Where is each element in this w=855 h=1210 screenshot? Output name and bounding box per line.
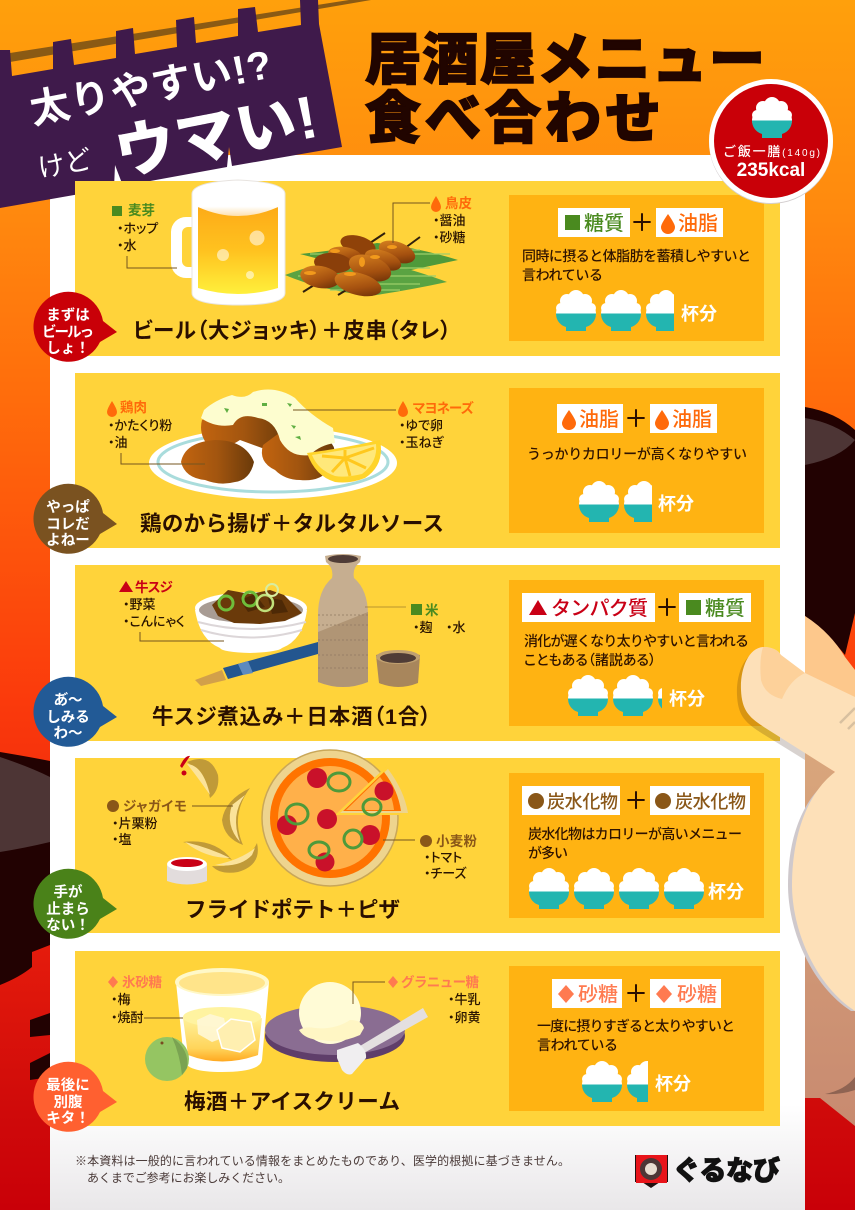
ingredient label: rice: ・水 [446, 620, 466, 635]
ingredient label: malt: ・水 [117, 238, 137, 253]
footnote: あくまでご参考にお楽しみください。 [87, 1170, 290, 1185]
nutrient tags: 糖質 [705, 597, 745, 620]
illustration: ice cream plate and spoon [265, 982, 428, 1074]
speech bubble: コレだ [46, 516, 90, 533]
footnote [75, 1153, 570, 1185]
dish title: 梅酒＋アイスクリーム [184, 1090, 400, 1114]
nutrient tags: 炭水化物 [547, 792, 618, 812]
rice bowl count [529, 868, 744, 909]
ingredient label: rice [365, 602, 466, 635]
description: 同時に摂ると体脂肪を蓄積しやすいと [522, 248, 751, 264]
ingredient label: potato: ・片栗粉 [112, 816, 158, 831]
description: 言われている [537, 1037, 618, 1053]
ingredient label: malt: ・ホップ [117, 221, 159, 236]
speech bubble: ビールっ [42, 323, 94, 341]
icon: rice bowl [752, 97, 792, 138]
nutrient tags: 油脂 [579, 408, 619, 431]
speech bubble: よねー [46, 532, 90, 549]
ingredient label: rock sugar: 氷砂糖 [122, 974, 162, 990]
nutrient tags: ＋ [624, 406, 648, 433]
nutrient tags [558, 208, 723, 237]
noren rod [10, 0, 371, 62]
dish title: 鶏のから揚げ＋タルタルソース [140, 512, 444, 536]
slogan connector: けど [35, 144, 94, 184]
nutrient tags: ＋ [630, 210, 654, 237]
illustration: chicken skin skewers on leaves [285, 232, 458, 301]
speech bubble: 止まら [46, 901, 90, 918]
nutrient tags [557, 404, 717, 433]
ingredient label: potato: ・塩 [112, 832, 132, 847]
ingredient label: mayonnaise: ・玉ねぎ [399, 435, 445, 450]
ingredient label: chicken skin [393, 195, 472, 245]
nutrient tags: 油脂 [678, 212, 718, 235]
illustration: sake cup [376, 650, 420, 687]
ingredient label: wheat flour: 小麦粉 [436, 833, 478, 849]
ingredient label: rice: 米 [425, 602, 439, 618]
speech bubble [33, 677, 117, 747]
speech bubble: キタ！ [46, 1110, 90, 1127]
main title: 食べ合わせ [365, 87, 661, 150]
description: が多い [528, 845, 568, 861]
speech bubble: やっぱ [46, 499, 90, 516]
illustration: pizza [262, 750, 413, 886]
description [528, 826, 742, 861]
noren banner with slogan [0, 0, 342, 208]
description: 消化が遅くなり太りやすいと言われる [524, 633, 749, 649]
speech bubble: 最後に [46, 1076, 90, 1094]
ingredient label: potato: ジャガイモ [123, 799, 187, 814]
rice bowl count: 杯分 [658, 494, 694, 514]
white content column [50, 155, 805, 1210]
dish title: ビール（大ジョッキ）＋皮串（タレ） [133, 319, 451, 343]
illustration: chopsticks [195, 642, 318, 686]
illustration: beer mug [171, 180, 285, 305]
ingredient label: mayonnaise [293, 400, 474, 450]
ingredient label: chicken: 鶏肉 [120, 399, 147, 415]
ingredient label: chicken [107, 399, 205, 464]
ingredient label: mayonnaise: マヨネーズ [412, 400, 474, 416]
speech bubble [33, 484, 117, 554]
ingredient label: beef tendon [119, 579, 224, 641]
ingredient label: beef tendon: 牛スジ [135, 579, 173, 595]
ingredient label: rock sugar: ・焼酎 [111, 1010, 144, 1025]
ingredient label: chicken: ・油 [108, 435, 128, 450]
description: 一度に摂りすぎると太りやすいと [537, 1018, 735, 1034]
nutrient tags [522, 786, 750, 815]
ingredient label: rock sugar: ・梅 [111, 992, 131, 1007]
nutrient tags: 砂糖 [677, 983, 717, 1006]
nutrient tags [522, 593, 751, 622]
illustration: green plum [145, 1037, 189, 1081]
illustration: plum wine glass [175, 968, 269, 1072]
speech bubble [33, 869, 117, 939]
speech bubble: 手が [54, 883, 83, 901]
ingredient label: granulated sugar: グラニュー糖 [401, 974, 480, 990]
speech bubble: しょ！ [46, 340, 90, 357]
panel 4: french fries and pizza [33, 750, 780, 939]
rice bowl count: 杯分 [655, 1074, 691, 1094]
ingredient label: beef tendon: ・野菜 [123, 597, 156, 612]
dish title: フライドポテト＋ピザ [185, 898, 400, 922]
panel 2: fried chicken and tartar sauce [33, 373, 780, 554]
speech bubble: 別腹 [54, 1094, 83, 1111]
main title [365, 28, 765, 150]
speech bubble: まずは [46, 307, 90, 324]
main title: 居酒屋メニュー [365, 28, 765, 91]
speech bubble [33, 1062, 117, 1132]
rice bowl count [582, 1061, 691, 1102]
logo: gurunavi [635, 1148, 780, 1188]
illustration: potato wedges and ketchup [167, 756, 258, 884]
badge label: ご飯一膳(140g) [723, 144, 820, 159]
ingredient label: mayonnaise: ・ゆで卵 [399, 418, 443, 433]
ingredient label: rice: ・麹 [413, 620, 433, 635]
left table silhouette [0, 752, 50, 1080]
speech bubble: わ〜 [54, 725, 82, 742]
panel 1: beer and chicken skin skewers [33, 180, 780, 362]
description: こともある（諸説ある） [524, 652, 656, 668]
illustration: stew bowl [195, 584, 307, 653]
speech bubble: あ゙〜 [54, 691, 82, 709]
nutrient tags: タンパク質 [551, 597, 648, 620]
nutrient tags: 油脂 [672, 408, 712, 431]
description: うっかりカロリーが高くなりやすい [527, 446, 747, 462]
ingredient label: wheat flour: ・トマト [424, 850, 462, 865]
ingredient label: malt [112, 202, 177, 268]
right table silhouette [805, 407, 855, 655]
hand and belly illustration [737, 616, 855, 1126]
rice bowl count [579, 481, 694, 522]
nutrient tags: 砂糖 [578, 983, 618, 1006]
description: 炭水化物はカロリーが高いメニュー [528, 826, 742, 842]
ingredient label: granulated sugar [353, 974, 481, 1025]
rice calorie badge [709, 79, 833, 204]
logo: gurunavi: ぐるなび [673, 1156, 780, 1186]
nutrient tags: 糖質 [584, 212, 624, 235]
ingredient label: beef tendon: ・こんにゃく [123, 614, 185, 629]
ingredient label: granulated sugar: ・卵黄 [448, 1010, 481, 1025]
rice bowl count: 杯分 [681, 304, 717, 324]
rice bowl count: 杯分 [669, 689, 705, 709]
description [522, 248, 751, 283]
ingredient label: wheat flour [383, 833, 478, 881]
rice bowl count [556, 290, 717, 331]
ingredient label: rock sugar [108, 974, 183, 1025]
nutrient tags [552, 979, 721, 1008]
description [524, 633, 749, 668]
nutrient tags: ＋ [624, 981, 648, 1008]
ingredient label: chicken: ・かたくり粉 [108, 418, 172, 433]
footnote: ※本資料は一般的に言われている情報をまとめたものであり、医学的根拠に基づきません。 [75, 1153, 570, 1168]
rice bowl count: 杯分 [708, 882, 744, 902]
speech bubble [33, 292, 117, 362]
nutrient tags: 炭水化物 [675, 792, 746, 812]
rice bowl count [568, 675, 705, 716]
description: 言われている [522, 267, 603, 283]
nutrient tags: ＋ [655, 595, 679, 622]
speech bubble: しみる [46, 709, 90, 726]
slogan big word: ウマい! [110, 83, 323, 188]
illustration: karaage plate with lemon [149, 390, 397, 499]
panel 5: plum wine and ice cream [33, 951, 780, 1132]
nutrient tags: ＋ [624, 788, 648, 815]
calorie value: 235kcal [737, 160, 805, 181]
ingredient label: malt: 麦芽 [128, 202, 155, 218]
ingredient label: granulated sugar: ・牛乳 [448, 992, 481, 1007]
ingredient label: wheat flour: ・チーズ [424, 866, 467, 881]
slogan line 1: 太りやすい!? [26, 43, 275, 133]
ingredient label: potato [107, 799, 233, 847]
ingredient label: chicken skin: 鳥皮 [445, 195, 472, 211]
description [537, 1018, 735, 1053]
ingredient label: chicken skin: ・醤油 [433, 213, 466, 228]
panel 3: beef tendon stew and sake [33, 554, 780, 747]
speech bubble: ない！ [46, 917, 90, 934]
illustration: sake flask [318, 554, 368, 687]
dish title: 牛スジ煮込み＋日本酒（1合） [152, 705, 431, 729]
ingredient label: chicken skin: ・砂糖 [433, 230, 466, 245]
